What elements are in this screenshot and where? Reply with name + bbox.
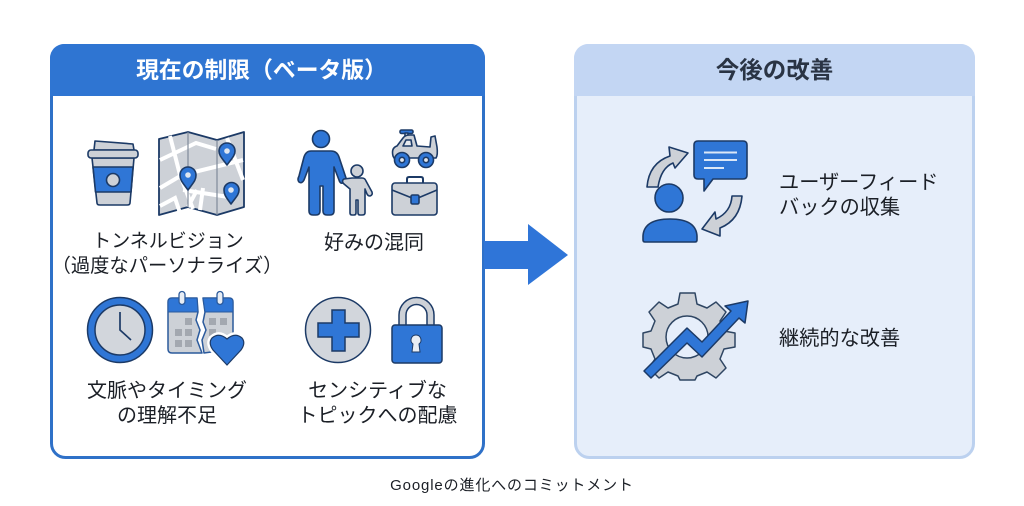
label: sensitive topics: センシティブな xyxy=(308,378,447,402)
footer caption: Googleの進化へのコミットメント xyxy=(390,477,634,494)
text: user feedback collection xyxy=(779,172,938,219)
label: mixed preferences: 好みの混同 xyxy=(324,231,424,254)
icon: map with pins xyxy=(159,132,244,215)
label: lack of context and timing xyxy=(87,379,247,427)
arrow xyxy=(484,224,568,285)
icon: briefcase xyxy=(392,177,437,215)
text: continuous improvement: 継続的な改善 xyxy=(779,327,900,350)
icon: adult holding child hand xyxy=(298,130,372,215)
heading bar: current limitations: 現在の制限（ベータ版） xyxy=(136,57,387,83)
label: lack of context and timing: の理解不足 xyxy=(117,404,217,427)
icon: padlock xyxy=(392,298,442,363)
icon: torn calendar with heart xyxy=(168,292,244,365)
text: user feedback collection: バックの収集 xyxy=(779,196,900,219)
label: lack of context and timing: 文脈やタイミング xyxy=(87,379,247,402)
panel: future improvements xyxy=(574,44,975,458)
icon: toy car xyxy=(392,130,437,168)
icon: user feedback loop xyxy=(643,141,747,242)
icon: medical cross xyxy=(306,298,370,362)
icon: clock xyxy=(88,298,152,362)
panel: current limitations xyxy=(50,44,485,458)
heading bar: future improvements: 今後の改善 xyxy=(716,57,833,83)
label: tunnel vision: トンネルビジョン xyxy=(92,230,244,252)
label: tunnel vision xyxy=(52,230,282,277)
icon: gear with rising arrow xyxy=(643,293,748,380)
heading bar: future improvements xyxy=(574,44,975,96)
icon: coffee cup xyxy=(88,141,138,205)
label: sensitive topics xyxy=(298,378,458,427)
text: user feedback collection: ユーザーフィード xyxy=(779,172,938,194)
heading bar: current limitations xyxy=(50,44,485,96)
label: tunnel vision: （過度なパーソナライズ） xyxy=(52,255,282,277)
label: sensitive topics: トピックへの配慮 xyxy=(298,404,458,427)
